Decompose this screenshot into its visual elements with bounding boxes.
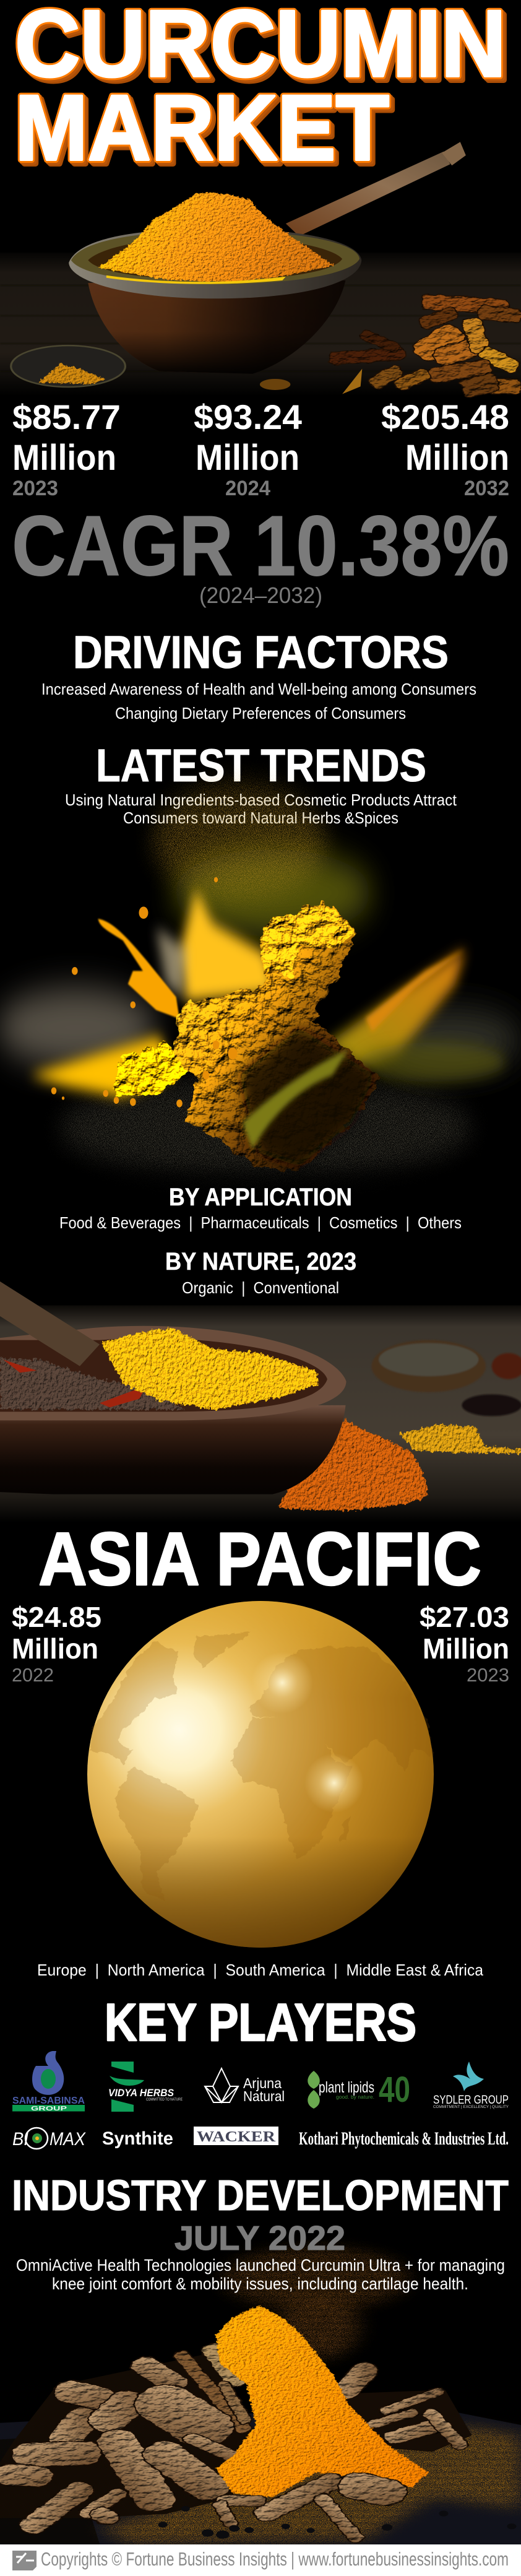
logo: Vidya Herbs: COMMITTED TO NATURE (146, 2098, 183, 2102)
stat: 2024 value (194, 397, 302, 500)
stat: 2022 regional value (12, 1601, 101, 1686)
title: MARKET (15, 76, 389, 180)
heading: BY APPLICATION (169, 1184, 352, 1211)
wooden spoon handle (286, 152, 450, 236)
foreground roots (210, 2469, 412, 2544)
logo: Plant Lipids: good. by nature. (336, 2094, 374, 2100)
stat: 2023 value (12, 397, 121, 500)
logo: Sami-Sabinsa (12, 2051, 85, 2112)
logo: Synthite: Synthite (102, 2128, 173, 2149)
heading: DRIVING FACTORS (73, 627, 449, 678)
date: JULY 2022 (174, 2219, 345, 2257)
logo: Plant Lipids: plant lipids (319, 2079, 374, 2096)
development text: knee joint comfort & mobility issues, including cartilage health. (52, 2275, 468, 2293)
trend text: Using Natural Ingredients-based Cosmetic Products Attract (65, 791, 457, 809)
logo row two (12, 2127, 509, 2149)
logo: Wacker: WACKER (197, 2129, 276, 2145)
stat: 2023 value: Million (12, 438, 116, 478)
spoon metal (308, 239, 332, 256)
key players heading: KEY PLAYERS (105, 1993, 416, 2052)
stat: 2032 value (381, 397, 509, 500)
yellow powder (101, 1328, 319, 1410)
dried turmeric pile (329, 294, 521, 399)
stat: 2023 regional value: Million (423, 1633, 509, 1665)
root fingers (0, 2341, 471, 2537)
stat: 2022 regional value: 2022 (12, 1664, 54, 1686)
driving factors (41, 627, 476, 722)
photo: turmeric roots and powder (0, 2247, 521, 2544)
by application segment (59, 1184, 462, 1232)
bowl body (88, 280, 345, 374)
logo: Sydler Group: COMMITMENT | EXCELLENCY | QUALITY (433, 2105, 509, 2109)
factor list (41, 680, 476, 722)
orange splash arm (98, 919, 179, 1019)
logo: Biomax: MAX (50, 2129, 86, 2149)
droplets (51, 877, 237, 1108)
logo: Biomax (12, 2128, 86, 2149)
other regions list: Europe | North America | South America | Middle East & Africa (37, 1961, 484, 1979)
nature list: Organic | Conventional (182, 1278, 339, 1297)
trend text (65, 791, 457, 827)
small dish (11, 345, 125, 387)
stat: 2023 regional value: $27.03 (420, 1601, 509, 1633)
stat: 2032 value: 2032 (464, 477, 509, 500)
footer bar (0, 2544, 521, 2576)
factor list: Changing Dietary Preferences of Consumers (115, 704, 406, 722)
region heading: ASIA PACIFIC (38, 1517, 481, 1601)
stat: 2032 value: Million (405, 438, 509, 478)
bowl rim (69, 228, 361, 298)
logo: Biomax: BI (12, 2129, 28, 2149)
logo: Vidya Herbs: VIDYA HERBS (108, 2087, 174, 2099)
trend text: Consumers toward Natural Herbs &Spices (123, 809, 398, 827)
CAGR figure: (2024–2032) (199, 583, 322, 608)
stat: 2022 regional value: Million (12, 1633, 98, 1665)
continents (90, 1632, 433, 1901)
logo: Sydler Group (433, 2062, 509, 2109)
mixed chilli spices (0, 1358, 186, 1410)
photo: wooden bowl with powder (0, 1281, 521, 1522)
logo: Fortune Business Insights (12, 2551, 37, 2570)
industry development (12, 2171, 509, 2293)
stat: 2023 regional value: 2023 (467, 1664, 509, 1686)
logo: Sami-Sabinsa: SAMI-SABINSA (12, 2096, 85, 2106)
factor list: Increased Awareness of Health and Well-being among Consumers (41, 680, 476, 698)
stat: 2024 value: Million (196, 438, 299, 478)
heading: BY NATURE, 2023 (165, 1248, 356, 1275)
by nature segment (165, 1248, 356, 1297)
logo: Arjuna Natural: Natural (243, 2088, 285, 2104)
stat: 2022 regional value: $24.85 (12, 1601, 101, 1633)
powder core mass (116, 901, 465, 1171)
logo: Arjuna Natural: Arjuna (243, 2075, 282, 2091)
small dish (371, 1340, 521, 1416)
stat: 2023 regional value (420, 1601, 509, 1686)
logo: Plant Lipids: 40 (379, 2070, 410, 2110)
title: MARKET (15, 76, 389, 180)
logo row one (12, 2051, 509, 2112)
spoon handle (0, 1281, 100, 1366)
hero photo: turmeric bowl (0, 142, 521, 399)
logo: Sami-Sabinsa: GROUP (31, 2105, 67, 2112)
logo: Wacker (194, 2127, 278, 2145)
highlights (251, 1652, 313, 1714)
photo: turmeric powder explosion (0, 784, 521, 1201)
stat: 2024 value: $93.24 (194, 397, 302, 436)
application list: Food & Beverages | Pharmaceuticals | Cosmetics | Others (59, 1213, 462, 1232)
peppercorns (158, 2506, 516, 2539)
latest trends (65, 740, 457, 827)
turmeric powder mound (98, 193, 334, 284)
stat: 2023 value: 2023 (12, 477, 58, 500)
title (15, 0, 506, 180)
stat: 2024 value: 2024 (225, 477, 270, 500)
powder pile (216, 2305, 429, 2497)
orange powder heap (279, 1419, 521, 1511)
logo: Plant Lipids (308, 2070, 410, 2110)
logo: Arjuna Natural (205, 2068, 285, 2104)
bowl (0, 1326, 347, 1494)
development text (16, 2256, 505, 2293)
stat: 2023 value: $85.77 (12, 397, 121, 436)
stat: 2032 value: $205.48 (381, 397, 509, 436)
heading: LATEST TRENDS (96, 740, 426, 791)
icon: golden globe (87, 1601, 434, 1948)
logo: Vidya Herbs (108, 2062, 183, 2112)
